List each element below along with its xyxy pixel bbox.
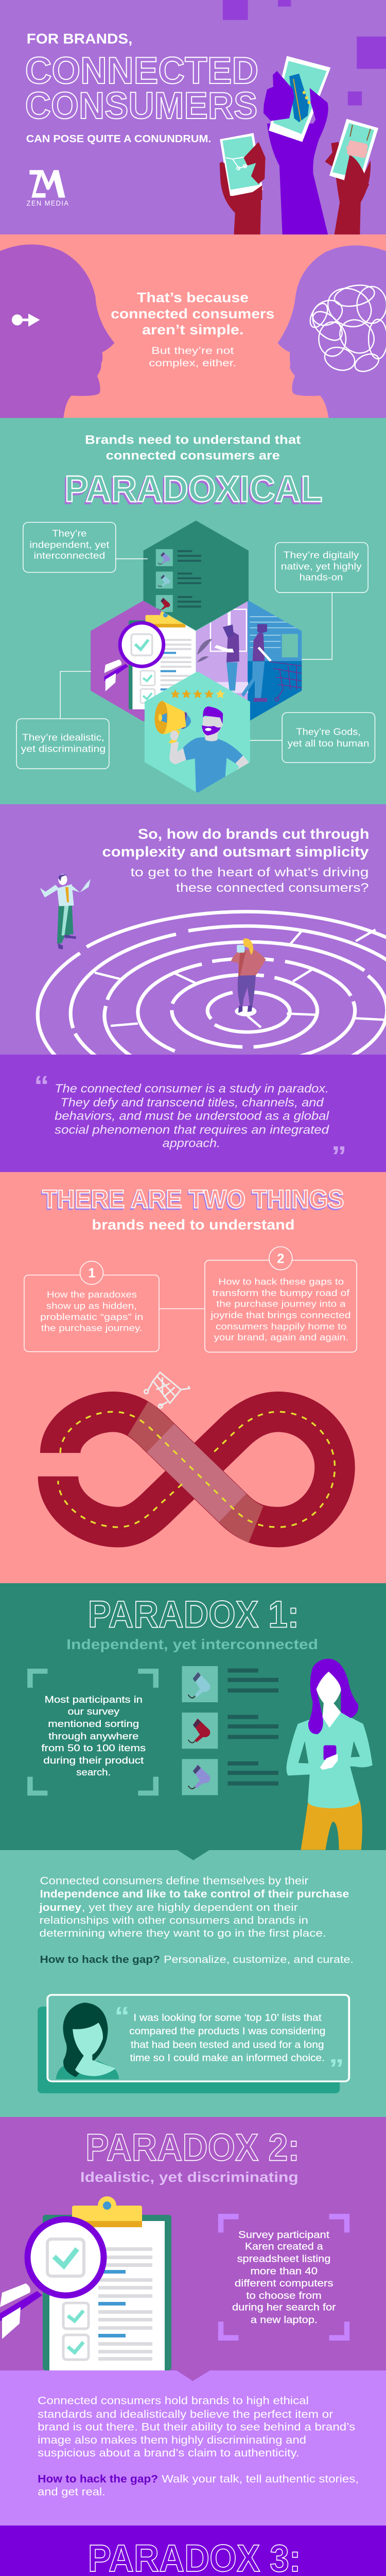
- icon: woman standing in the center of the maze: [231, 938, 266, 1013]
- text block: ethics: How to hack the gap?: [38, 2472, 158, 2485]
- callout: idealistic: yet discriminating: [21, 744, 106, 754]
- panel: two heads background: [0, 234, 386, 418]
- text block: testimonial: that had been tested and used for a long: [131, 2039, 324, 2050]
- text block: survey finding: mentioned sorting: [48, 1718, 139, 1730]
- quotation mark: “: [114, 2002, 130, 2031]
- pull quote: “: [34, 1071, 49, 1101]
- text block: definition: [40, 1874, 349, 1900]
- callout: point 1: show up as hidden,: [46, 1300, 137, 1311]
- text block: survey finding: our survey: [68, 1706, 119, 1717]
- hexagon: independent yet interconnected: [143, 520, 249, 631]
- icon: left head with straight arrow: [0, 244, 114, 418]
- text block: definition continued: , yet they are highly dependent on their: [82, 1902, 298, 1913]
- panel: two things background: [0, 1172, 386, 1583]
- icon: woman avatar: [56, 2003, 119, 2079]
- panel: quote background: [0, 1055, 386, 1172]
- callout: gods: yet all too human: [288, 738, 369, 749]
- heading: THERE ARE TWO THINGS: [41, 1187, 343, 1215]
- panel: paradoxical background: [0, 418, 386, 804]
- text block: Karen's search: a new laptop.: [251, 2315, 318, 2326]
- text block: survey finding: during their product: [43, 1755, 144, 1766]
- callout: point 2: consumers happily home to: [216, 1321, 347, 1332]
- heading: [66, 1594, 318, 1653]
- callout: independent: They’re: [52, 529, 86, 539]
- pull quote: ”: [331, 1141, 346, 1172]
- pull quote: They defy and transcend titles, channels, and: [60, 1096, 324, 1109]
- hexagon: digitally native yet highly hands-on: [196, 601, 302, 721]
- paradox 2 heading: Idealistic, yet discriminating: [80, 2169, 299, 2185]
- text block: ethics: image also makes them highly discriminating and: [38, 2434, 306, 2446]
- paradox 2 heading: PARADOX 2:: [85, 2126, 300, 2168]
- hexagon: idealistic yet discriminating: [91, 601, 202, 721]
- text block: ethics: brand is out there. But their ability to see behind a brand’s: [38, 2420, 355, 2433]
- bracket frame: [218, 2214, 349, 2341]
- decorative squares: [223, 0, 386, 106]
- text block: ethics: [38, 2394, 359, 2498]
- icon: woman with phone: [287, 1659, 373, 1850]
- survey callout: [218, 2214, 349, 2341]
- text block: simple, not complex: That’s because: [137, 291, 249, 306]
- infinity road illustration: [58, 1412, 335, 1527]
- callout: point 2: the purchase journey into a: [216, 1299, 346, 1309]
- text block: definition continued: How to hack the gap?: [40, 1953, 160, 1965]
- text block: Karen's search: Karen created a: [245, 2241, 323, 2252]
- text block: simple, not complex: complex, either.: [149, 358, 236, 368]
- product list: [182, 1666, 278, 1795]
- text block: Karen's search: Survey participant: [238, 2229, 329, 2240]
- text block: survey finding: search.: [76, 1767, 111, 1778]
- heading: PARADOX 1:: [88, 1594, 299, 1636]
- text block: survey finding: [41, 1694, 146, 1778]
- text block: Karen's search: more than 40: [250, 2266, 318, 2277]
- callout: independent: [23, 522, 148, 572]
- text block: definition continued: relationships with other consumers and brands in: [40, 1914, 308, 1926]
- paradox 1 text: [39, 1874, 354, 1965]
- panel: maze background: [0, 804, 386, 1055]
- text block: ethics: standards and idealistically believe the perfect item or: [38, 2408, 334, 2420]
- icon: clipboard with magnifier: [0, 2196, 171, 2370]
- title: CONSUMERS: [25, 85, 257, 127]
- panel: paradox 3 background: [0, 2526, 386, 2576]
- callout: point 2: transform the bumpy road of: [213, 1287, 349, 1298]
- callout: digitally native: native, yet highly: [281, 562, 362, 572]
- section notch: [177, 1850, 210, 1860]
- text block: Karen's search: to choose from: [246, 2290, 322, 2301]
- title: CONNECTED: [25, 50, 258, 92]
- text block: survey finding: from 50 to 100 items: [41, 1743, 146, 1754]
- testimonial card: [38, 1995, 349, 2093]
- text block: ethics: and get real.: [38, 2485, 106, 2498]
- heading: complexity and outsmart simplicity: [102, 844, 369, 860]
- pull quote: approach.: [163, 1137, 220, 1150]
- heading: THERE ARE TWO THINGS: [42, 1185, 344, 1214]
- maze illustration: [38, 911, 386, 1057]
- maze section: [34, 826, 386, 1172]
- panel: paradox 1 background: [0, 1583, 386, 1850]
- text block: ethics: Connected consumers hold brands to high ethical: [38, 2394, 309, 2406]
- icon: man standing at the maze: [40, 874, 91, 950]
- heading: PARADOXICAL: [64, 469, 323, 510]
- icon: shopping cart: [144, 1372, 189, 1408]
- icon: right head with tangled thoughts: [278, 245, 386, 418]
- two things section: [24, 1185, 357, 1527]
- title: CAN POSE QUITE A CONUNDRUM.: [26, 133, 211, 145]
- text block: ethics: suspicious about a brand’s claim to authenticity.: [38, 2446, 300, 2459]
- callout: digitally native: hands-on: [300, 572, 343, 583]
- title: FOR BRANDS,: [27, 31, 132, 47]
- panel: hero background: [0, 0, 386, 234]
- text block: testimonial: [129, 2012, 325, 2063]
- heading: [63, 433, 323, 512]
- text block: ethics: Walk your talk, tell authentic stories,: [162, 2472, 359, 2485]
- heading: [102, 826, 369, 895]
- callout: point 2: your brand, again and again.: [214, 1332, 348, 1343]
- text block: testimonial: I was looking for some ‘top 10’ lists that: [133, 2012, 322, 2023]
- text block: survey finding: Most participants in: [45, 1694, 143, 1705]
- hero section: [25, 0, 386, 234]
- heading: [41, 1185, 344, 1232]
- pull quote: The connected consumer is a study in paradox.: [55, 1082, 329, 1095]
- pull quote: social phenomenon that requires an integrated: [55, 1123, 329, 1137]
- callout: point 1: problematic “gaps” in: [40, 1312, 143, 1322]
- heading: Brands need to understand that: [85, 433, 301, 447]
- text block: definition continued: journey: [39, 1902, 81, 1913]
- callout: independent: interconnected: [34, 551, 105, 561]
- callout: point 1: [24, 1261, 159, 1352]
- text block: survey finding: through anywhere: [48, 1731, 138, 1742]
- hexagon: gods yet all too human: [145, 671, 250, 804]
- callout: idealistic: [16, 671, 109, 769]
- text block: definition: Independence and like to take control of their purchase: [40, 1888, 349, 1900]
- callout: gods: They’re Gods,: [296, 727, 361, 737]
- text block: testimonial: time so I could make an informed choice.: [130, 2053, 325, 2063]
- text block: definition continued: Personalize, customize, and curate.: [164, 1953, 354, 1965]
- text block: Karen's search: [232, 2229, 336, 2326]
- pull quote: behaviors, and must be understood as a global: [55, 1109, 329, 1123]
- text block: Karen's search: different computers: [235, 2278, 334, 2289]
- text block: testimonial: compared the products I was considering: [129, 2026, 325, 2037]
- heading: to get to the heart of what’s driving: [131, 866, 369, 879]
- paradox 2 text: [38, 2370, 359, 2576]
- text block: Karen's search: spreadsheet listing: [237, 2253, 330, 2264]
- callout: point 2: 2: [277, 1251, 284, 1266]
- callout: point 1: the purchase journey.: [41, 1323, 142, 1333]
- panel: paradox 1 text background: [0, 1850, 386, 2117]
- callout: idealistic: They’re idealistic,: [22, 733, 104, 743]
- icon: left hand with phone and cart: [220, 133, 266, 234]
- heading: these connected consumers?: [176, 881, 369, 895]
- paradoxical section: [16, 435, 376, 793]
- callout: point 2: [205, 1247, 357, 1352]
- connector between boxes: [159, 1308, 205, 1310]
- text block: simple, not complex: connected consumers: [111, 307, 274, 321]
- callout: point 2: joyride that brings connected: [210, 1310, 351, 1320]
- text block: definition continued: [39, 1902, 354, 1965]
- heading: brands need to understand: [92, 1216, 295, 1232]
- zen media logo: ZEN MEDIA: [27, 199, 68, 207]
- bracket frame: [27, 1669, 159, 1795]
- text block: Karen's search: during her search for: [232, 2302, 336, 2313]
- text block: simple, not complex: [111, 291, 274, 368]
- text block: definition: Connected consumers define themselves by their: [40, 1874, 308, 1887]
- title: [25, 31, 258, 145]
- text block: simple, not complex: But they’re not: [151, 345, 234, 356]
- panel: paradox 2 background: [0, 2117, 386, 2370]
- heading: Independent, yet interconnected: [66, 1637, 318, 1653]
- section notch: [176, 2370, 210, 2381]
- callout: gods: [250, 713, 375, 762]
- text block: definition continued: determining where they want to go in the first place.: [40, 1927, 326, 1939]
- heading: PARADOXICAL: [63, 470, 321, 512]
- panel: paradox 2 text background: [0, 2370, 386, 2526]
- callout: point 1: 1: [88, 1266, 96, 1281]
- heading: So, how do brands cut through: [138, 826, 369, 842]
- heading: connected consumers are: [106, 449, 280, 463]
- paradox 1 section: [27, 1594, 318, 1860]
- icon: center hand with phone and shoe: [264, 56, 330, 234]
- callout: independent: independent, yet: [29, 540, 109, 550]
- paradox 2 heading: [80, 2126, 300, 2185]
- quotation mark: ”: [329, 2054, 344, 2083]
- icon: right hand with phone and bag: [325, 119, 378, 234]
- callout: point 1: How the paradoxes: [47, 1289, 137, 1299]
- zen media logo: [27, 170, 68, 207]
- text block: simple, not complex: aren’t simple.: [142, 323, 244, 337]
- callout: digitally native: [275, 543, 368, 659]
- callout: digitally native: They’re digitally: [284, 550, 359, 561]
- callout: point 2: How to hack these gaps to: [218, 1276, 344, 1286]
- pull quote: [34, 1071, 346, 1172]
- two heads section: [0, 244, 386, 418]
